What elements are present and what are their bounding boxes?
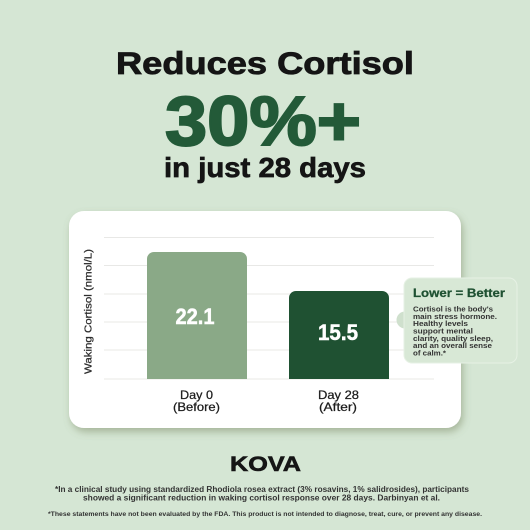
callout heading: Lower = Better — [413, 286, 505, 300]
y-axis label: Waking Cortisol (nmol/L) — [82, 249, 94, 374]
study footnote — [55, 484, 469, 502]
study footnote: showed a significant reduction in waking cortisol response over 28 days. Darbinyan et al. — [83, 492, 440, 502]
callout body: main stress hormone. — [413, 312, 497, 321]
headline stat: 30%+ — [165, 82, 361, 160]
callout — [396, 278, 517, 363]
label: day 0: (Before) — [173, 400, 220, 414]
callout body — [413, 304, 497, 358]
label: day 28: (After) — [319, 400, 357, 414]
label: day 0 — [173, 388, 220, 414]
label: day 0: Day 0 — [180, 388, 213, 402]
callout body: Cortisol is the body's — [413, 304, 493, 314]
panel: chart card — [69, 211, 461, 428]
callout body: clarity, quality sleep, — [413, 334, 493, 343]
FDA disclaimer: *These statements have not been evaluated by the FDA. This product is not intended to diagnose, treat, cure, or prevent any disease. — [48, 511, 482, 518]
callout body: of calm.* — [413, 348, 446, 358]
value: 22.1: 22.1 — [176, 304, 214, 329]
subtitle: in just 28 days — [164, 152, 366, 183]
bar: day 28 — [289, 291, 389, 379]
callout body: and an overall sense — [413, 341, 492, 350]
callout body: support mental — [413, 326, 473, 336]
study footnote: *In a clinical study using standardized Rhodiola rosea extract (3% rosavins, 1% salidrosides), participants — [55, 484, 469, 494]
bar: day 0 — [147, 252, 247, 379]
callout body: Healthy levels — [413, 319, 468, 328]
brand logo: KOVA — [230, 453, 301, 476]
label: day 28: Day 28 — [318, 388, 359, 402]
title: Reduces Cortisol — [116, 45, 414, 81]
label: day 28 — [318, 388, 359, 414]
value: 15.5: 15.5 — [318, 320, 358, 345]
grid lines — [104, 238, 434, 379]
